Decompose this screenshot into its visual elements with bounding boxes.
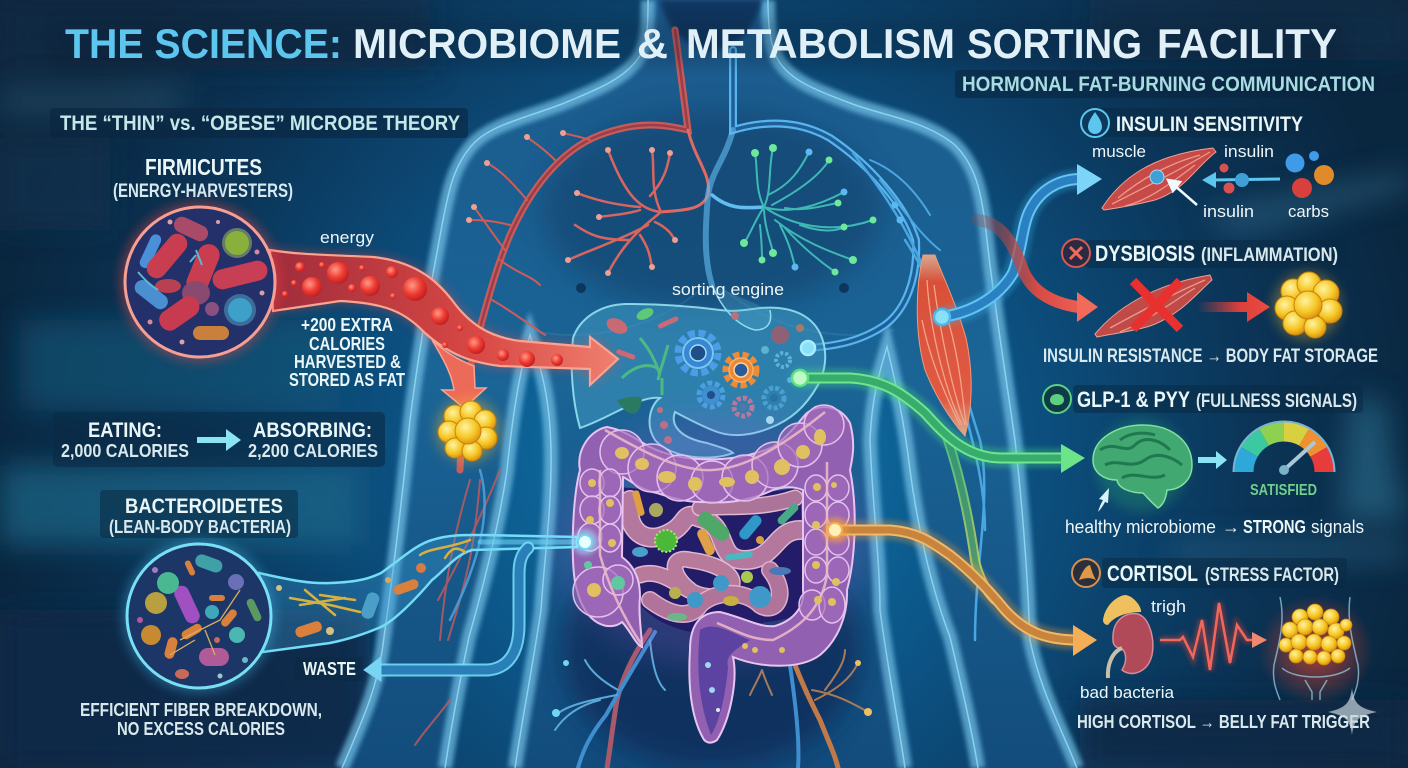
arrow: firmicutes energy to liver <box>270 250 618 408</box>
title: MICROBIOME <box>353 20 621 67</box>
arrow: to fat <box>1197 292 1270 322</box>
absorbing: ABSORBING: <box>253 419 372 442</box>
colon pouches <box>573 405 849 623</box>
panel: GLP-1 and PYY <box>1043 385 1364 537</box>
arrow: eating to absorbing <box>197 429 241 451</box>
icon: kidney and adrenal <box>1103 595 1153 678</box>
panel: eating vs absorbing: 2,200 CALORIES <box>248 441 378 461</box>
label: insulin top: insulin <box>1224 142 1274 161</box>
title: SORTING <box>967 20 1142 67</box>
lower vessels <box>552 630 872 768</box>
icon: fat cells <box>1273 272 1342 340</box>
small intestine loops <box>629 498 800 614</box>
title: THE SCIENCE: <box>65 20 342 67</box>
caption: fibre breakdown: NO EXCESS CALORIES <box>117 719 285 739</box>
bacteroidetes bacteria circle <box>123 540 275 692</box>
healthy microbiome caption: signals <box>1311 517 1364 537</box>
label: bad bacteria: bad bacteria <box>1080 683 1175 702</box>
bicep muscle <box>917 255 971 436</box>
title: FACILITY <box>1157 20 1337 67</box>
panel: cortisol <box>1072 558 1374 732</box>
energy droplets <box>282 262 563 367</box>
liver microbes <box>604 306 804 444</box>
GLP-1 heading: GLP-1 & PYY <box>1077 387 1190 412</box>
label: insulin bottom: insulin <box>1203 202 1254 221</box>
signal pulse <box>1160 603 1267 670</box>
red vessels and left lung <box>415 30 709 745</box>
liver and stomach: sorting engine <box>572 280 825 458</box>
branch arrow to fat <box>432 340 486 408</box>
icon: satiety gauge <box>1234 422 1334 499</box>
insulin dots and carbs <box>1220 151 1334 198</box>
icon: belly fat <box>1258 595 1374 705</box>
arrow: brain to gauge <box>1198 451 1227 469</box>
icon: corner sparkle <box>1328 688 1377 735</box>
icon: x circle <box>1062 239 1090 267</box>
icon: green brain <box>1093 419 1192 511</box>
bacteroidetes heading: BACTEROIDETES <box>125 495 283 518</box>
firmicutes subheading: (ENERGY-HARVESTERS) <box>113 181 293 202</box>
icon: stress badge <box>1072 559 1100 587</box>
eating: EATING: <box>88 419 162 442</box>
arrow: dysbiosis red <box>977 220 1098 322</box>
arrow: waste <box>364 548 528 681</box>
icon: healthy muscle <box>1102 148 1216 210</box>
dysbiosis heading: DYSBIOSIS <box>1095 241 1195 266</box>
panel: firmicutes <box>113 154 293 361</box>
colon tube <box>573 407 855 743</box>
caption: fibre breakdown <box>80 700 322 739</box>
caption: fibre breakdown: EFFICIENT FIBER BREAKDOWN, <box>80 700 322 720</box>
human body silhouette <box>342 0 1077 768</box>
label: waste: WASTE <box>303 659 356 679</box>
healthy microbiome caption: → <box>1222 517 1240 537</box>
colon inner band <box>600 412 827 645</box>
fibre and cargo <box>276 540 470 639</box>
label: energy: energy <box>320 228 375 247</box>
insulin sensitivity heading: INSULIN SENSITIVITY <box>1116 113 1303 136</box>
callout: extra calories: STORED AS FAT <box>289 370 405 390</box>
label: trigh: trigh <box>1151 597 1186 616</box>
label: satisfied: SATISFIED <box>1250 482 1317 499</box>
title: & <box>637 20 668 67</box>
title: METABOLISM <box>686 20 955 67</box>
colon specks <box>586 429 840 653</box>
dysbiosis heading: (INFLAMMATION) <box>1201 245 1338 266</box>
icon: brain badge <box>1043 385 1071 413</box>
arrow: muscle to insulin sensitivity <box>801 164 1102 355</box>
icon: water drop <box>1081 109 1109 137</box>
heading: microbe theory <box>50 108 468 138</box>
firmicutes bacteria circle <box>121 203 279 361</box>
arrow: insulin into muscle <box>1202 172 1280 188</box>
panel: bacteroidetes <box>100 490 298 692</box>
title <box>55 20 1345 67</box>
healthy microbiome caption: STRONG <box>1243 517 1306 537</box>
heading: microbe theory: THE “THIN” vs. “OBESE” MICROBE THEORY <box>60 112 460 135</box>
blue vessels and right lung <box>706 50 985 640</box>
callout: extra calories: +200 EXTRA <box>301 315 393 335</box>
healthy microbiome caption <box>1065 517 1364 537</box>
GLP-1 heading <box>1077 387 1357 412</box>
bacteroidetes subheading: (LEAN-BODY BACTERIA) <box>109 517 291 537</box>
fat cell cluster left <box>436 398 500 462</box>
cortisol heading <box>1107 561 1339 586</box>
arrow: colon to cortisol orange <box>822 517 1097 656</box>
label: muscle: muscle <box>1092 142 1146 161</box>
heading: hormonal communication: HORMONAL FAT-BURNING COMMUNICATION <box>962 73 1375 96</box>
healthy microbiome caption: healthy microbiome <box>1065 517 1216 537</box>
arrow: liver to GLP-1 green <box>792 370 1085 600</box>
dysbiosis heading <box>1095 241 1338 266</box>
arrow: bacteroidetes from colon <box>259 529 598 681</box>
callout: extra calories <box>289 315 405 390</box>
gut microbes <box>632 490 800 621</box>
GLP-1 heading: (FULLNESS SIGNALS) <box>1196 391 1357 412</box>
gears <box>678 333 790 416</box>
icon: damaged muscle <box>1095 275 1212 337</box>
colon and small intestine <box>557 405 867 743</box>
rectum interior <box>698 627 750 735</box>
cortisol heading: CORTISOL <box>1107 561 1198 586</box>
arrow: white pointer <box>1168 180 1197 205</box>
glowing node <box>572 529 598 555</box>
panel: eating vs absorbing: 2,000 CALORIES <box>61 441 189 461</box>
label: carbs: carbs <box>1288 202 1329 221</box>
cortisol heading: (STRESS FACTOR) <box>1205 565 1339 586</box>
label: sorting engine: sorting engine <box>672 280 784 299</box>
callout: extra calories: CALORIES <box>309 334 385 354</box>
panel: dysbiosis <box>1043 239 1378 367</box>
panel: insulin sensitivity <box>1081 108 1334 221</box>
panel: eating vs absorbing <box>53 412 385 467</box>
arrow: small white <box>1098 488 1109 512</box>
firmicutes heading: FIRMICUTES <box>145 154 262 180</box>
callout: extra calories: HARVESTED & <box>294 352 401 372</box>
